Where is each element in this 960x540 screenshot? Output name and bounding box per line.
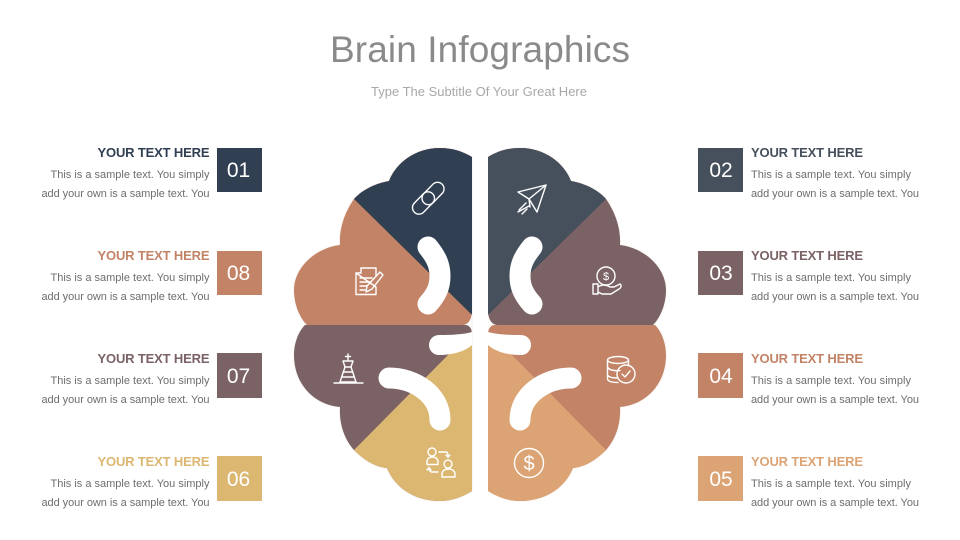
icon: document and pencil xyxy=(356,268,383,294)
item 04 xyxy=(698,351,919,406)
right hemisphere halo xyxy=(488,148,666,501)
badge 01 xyxy=(217,148,262,192)
body 08: add your own is a sample text. You xyxy=(42,291,210,303)
body 02: add your own is a sample text. You xyxy=(751,188,919,200)
body 03 xyxy=(751,272,919,303)
body 04: This is a sample text. You simply xyxy=(751,375,912,387)
icon: dollar coin: $ xyxy=(523,453,535,475)
badge 02: 02 xyxy=(709,159,733,182)
body 07: This is a sample text. You simply xyxy=(50,375,210,387)
body 02 xyxy=(751,169,919,200)
body 06: This is a sample text. You simply xyxy=(50,478,210,490)
brain diagram xyxy=(293,147,667,502)
badge 01: 01 xyxy=(227,159,250,182)
item 01 xyxy=(42,145,262,200)
item 07 xyxy=(42,351,262,406)
item 03 xyxy=(698,248,919,303)
body 08: This is a sample text. You simply xyxy=(50,272,210,284)
left hemisphere xyxy=(294,148,472,501)
heading 04: YOUR TEXT HERE xyxy=(751,351,863,366)
right hemisphere xyxy=(488,148,666,501)
badge 04: 04 xyxy=(709,365,733,388)
left hemisphere halo xyxy=(294,148,472,501)
heading 07: YOUR TEXT HERE xyxy=(98,351,210,366)
heading 08: YOUR TEXT HERE xyxy=(98,248,210,263)
title: Brain Infographics xyxy=(330,29,630,70)
body 03: This is a sample text. You simply xyxy=(751,272,912,284)
badge 06: 06 xyxy=(227,468,250,491)
body 05 xyxy=(751,478,919,509)
body 06: add your own is a sample text. You xyxy=(42,497,210,509)
item 06 xyxy=(42,454,262,509)
badge 02 xyxy=(698,148,743,192)
body 08 xyxy=(42,272,210,303)
body 07 xyxy=(42,375,210,406)
badge 08: 08 xyxy=(227,262,250,285)
body 03: add your own is a sample text. You xyxy=(751,291,919,303)
heading 06: YOUR TEXT HERE xyxy=(98,454,210,469)
badge 08 xyxy=(217,251,262,295)
body 01: This is a sample text. You simply xyxy=(50,169,210,181)
heading 02: YOUR TEXT HERE xyxy=(751,145,863,160)
body 04 xyxy=(751,375,919,406)
badge 04 xyxy=(698,353,743,398)
body 06 xyxy=(42,478,210,509)
heading 03: YOUR TEXT HERE xyxy=(751,248,863,263)
badge 07 xyxy=(217,353,262,398)
body 02: This is a sample text. You simply xyxy=(751,169,912,181)
icon: hand holding coin: $ xyxy=(603,271,609,283)
body 07: add your own is a sample text. You xyxy=(42,394,210,406)
icon: hand holding coin xyxy=(593,267,621,294)
badge 03 xyxy=(698,251,743,295)
badge 05 xyxy=(698,456,743,501)
icon: chess king xyxy=(334,354,363,383)
body 01: add your own is a sample text. You xyxy=(42,188,210,200)
subtitle: Type The Subtitle Of Your Great Here xyxy=(371,84,587,99)
item 05 xyxy=(698,454,919,509)
badge 06 xyxy=(217,456,262,501)
body 04: add your own is a sample text. You xyxy=(751,394,919,406)
left folds xyxy=(389,247,472,420)
icon: chain link xyxy=(410,180,447,217)
icon: database check xyxy=(608,356,635,383)
center gap xyxy=(473,140,488,510)
heading 01: YOUR TEXT HERE xyxy=(98,145,210,160)
badge 03: 03 xyxy=(709,262,733,285)
right folds xyxy=(488,247,571,420)
body 05: add your own is a sample text. You xyxy=(751,497,919,509)
heading 05: YOUR TEXT HERE xyxy=(751,454,863,469)
badge 07: 07 xyxy=(227,365,250,388)
body 05: This is a sample text. You simply xyxy=(751,478,912,490)
body 01 xyxy=(42,169,210,200)
icon: paper plane xyxy=(518,185,546,214)
item 02 xyxy=(698,145,919,200)
icon: dollar coin xyxy=(514,448,544,478)
item 08 xyxy=(42,248,262,303)
badge 05: 05 xyxy=(709,468,733,491)
icon: people swap xyxy=(427,448,455,477)
